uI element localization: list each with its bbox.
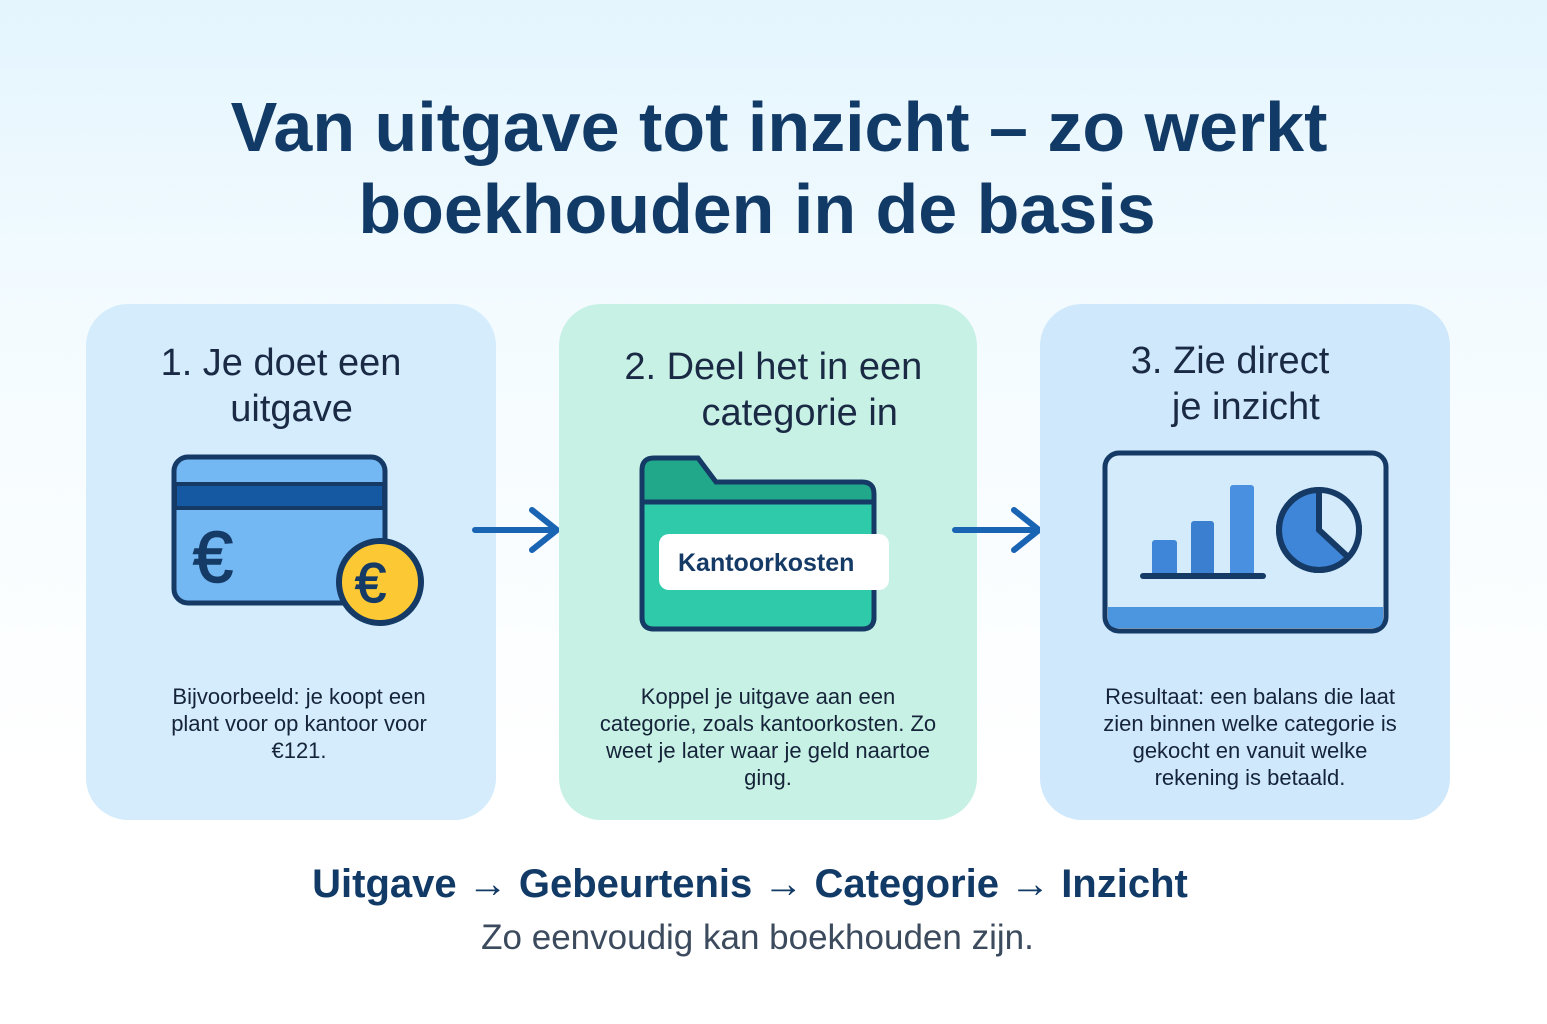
heading step 2: categorie in xyxy=(701,392,898,434)
heading step 1: uitgave xyxy=(230,388,353,430)
panel: step 3 xyxy=(1040,304,1450,820)
tagline: Zo eenvoudig kan boekhouden zijn. xyxy=(481,918,1034,957)
text step 1 xyxy=(171,684,427,763)
text step 3: zien binnen welke categorie is xyxy=(1103,711,1397,736)
icon: folder with label: Kantoorkosten xyxy=(678,549,854,577)
text step 3: rekening is betaald. xyxy=(1155,765,1345,790)
heading step 3 xyxy=(1131,340,1330,428)
text step 1: €121. xyxy=(271,738,327,763)
title xyxy=(231,88,1327,248)
heading step 1 xyxy=(161,342,401,430)
heading step 2 xyxy=(624,346,922,434)
text step 2: weet je later waar je geld naartoe xyxy=(606,738,930,763)
icon: credit card with coin: € xyxy=(355,551,386,614)
text step 1: plant voor op kantoor voor xyxy=(171,711,427,736)
panel: step 1 xyxy=(86,304,496,820)
summary flow: Uitgave → Gebeurtenis → Categorie → Inzicht xyxy=(312,862,1188,906)
heading step 3: 3. Zie direct xyxy=(1131,340,1329,382)
heading step 1: 1. Je doet een xyxy=(161,342,401,384)
arrow 2 xyxy=(952,507,1040,553)
text step 3: Resultaat: een balans die laat xyxy=(1105,684,1395,709)
heading step 2: 2. Deel het in een xyxy=(624,346,922,388)
title: Van uitgave tot inzicht – zo werkt xyxy=(231,88,1327,166)
text step 3: gekocht en vanuit welke xyxy=(1133,738,1367,763)
arrow 1 xyxy=(472,507,559,553)
heading step 3: je inzicht xyxy=(1172,386,1320,428)
title: boekhouden in de basis xyxy=(358,170,1156,248)
icon: dashboard with charts xyxy=(1102,450,1388,634)
text step 2: ging. xyxy=(744,765,792,790)
icon: credit card with coin xyxy=(172,454,424,626)
text step 1: Bijvoorbeeld: je koopt een xyxy=(172,684,426,709)
icon: credit card with coin: € xyxy=(193,518,233,598)
text step 3 xyxy=(1103,684,1397,790)
text step 2 xyxy=(600,684,936,790)
text step 2: Koppel je uitgave aan een xyxy=(641,684,895,709)
panel: step 2 xyxy=(559,304,977,820)
icon: folder with label xyxy=(640,456,889,632)
text step 2: categorie, zoals kantoorkosten. Zo xyxy=(600,711,936,736)
